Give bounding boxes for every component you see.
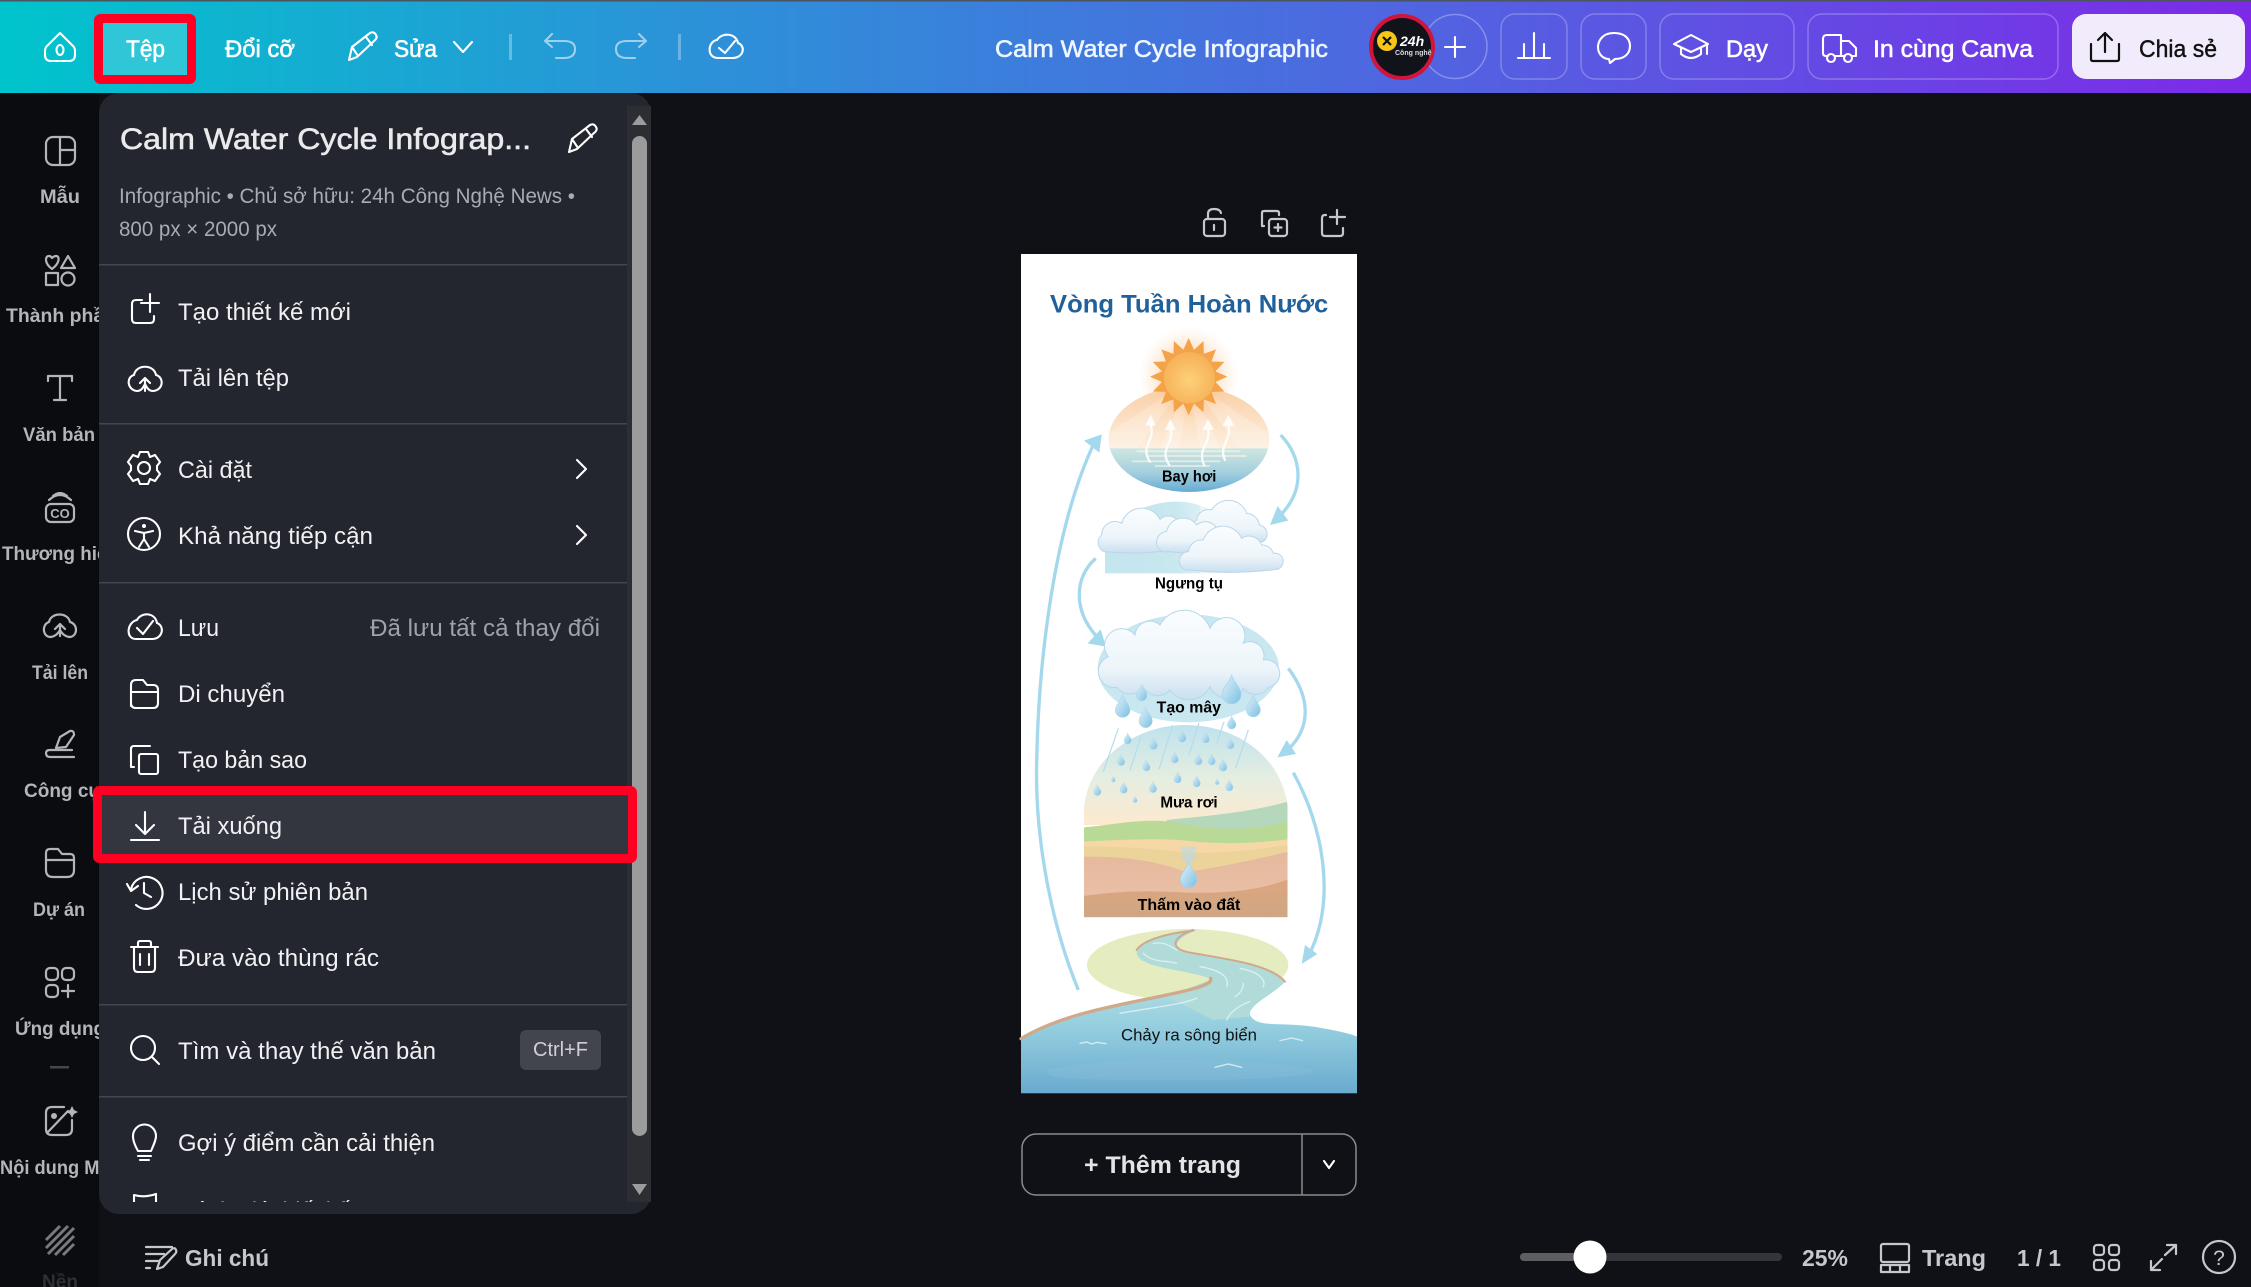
item: version history <box>127 877 368 909</box>
item: accessibility: Khả năng tiếp cận <box>178 523 373 550</box>
highlighted download item: Tải xuống <box>178 813 282 840</box>
label: cloud formation: Tạo mây <box>1157 700 1221 717</box>
sidebar item: uploads: Tải lên <box>32 663 88 684</box>
item: save <box>129 614 600 642</box>
rain streaks <box>1103 722 1248 772</box>
page view toggle: Trang <box>1922 1245 1986 1271</box>
highlighted download item <box>98 790 632 858</box>
add page button: + Thêm trang <box>1084 1152 1241 1179</box>
sidebar item: background <box>42 1226 78 1287</box>
item: settings <box>128 452 586 484</box>
rain drops <box>1094 730 1234 803</box>
button: print with Canva <box>1808 14 2058 79</box>
page view toggle <box>1881 1244 1986 1272</box>
item: move to trash: Đưa vào thùng rác <box>178 945 379 972</box>
item: clipped design review: Đánh giá thiết kế <box>178 1198 351 1225</box>
file menu panel <box>98 93 651 1225</box>
design metadata <box>119 185 575 241</box>
sidebar item: brand: Thương hiệu <box>2 544 119 565</box>
menu: edit: Sửa <box>394 36 438 63</box>
item: duplicate: Tạo bản sao <box>178 747 307 774</box>
button: share: Chia sẻ <box>2139 36 2217 63</box>
notes button <box>146 1245 269 1271</box>
evaporation scene <box>1107 327 1273 493</box>
cloud formation scene <box>1098 610 1280 729</box>
sidebar item: text: Văn bản <box>23 425 95 446</box>
icon: home <box>45 33 75 61</box>
sidebar item: text <box>23 376 95 446</box>
avatar: Công nghệ <box>1395 50 1432 57</box>
rain cloud <box>1098 610 1280 700</box>
icon: help <box>2203 1241 2235 1273</box>
icon: fullscreen <box>2151 1245 2176 1270</box>
collaborator add button <box>1423 14 1487 78</box>
label: evaporation: Bay hơi <box>1162 469 1216 486</box>
river and sea scene <box>1021 929 1357 1093</box>
sidebar item: projects: Dự án <box>33 900 85 921</box>
menu: resize: Đổi cỡ <box>225 36 295 63</box>
item: save: Đã lưu tất cả thay đổi <box>370 615 600 642</box>
item: save: Lưu <box>178 615 219 642</box>
sky and sea ellipse <box>1108 392 1270 492</box>
button: share <box>2072 14 2245 79</box>
label: condensation: Ngưng tụ <box>1155 575 1223 592</box>
design metadata: Infographic • Chủ sở hữu: 24h Công Nghệ News • <box>119 185 575 208</box>
icon: lock <box>1204 209 1225 236</box>
sidebar item: brand: CO <box>50 506 70 521</box>
item: accessibility <box>128 518 586 550</box>
sidebar item: apps: Ứng dụng <box>15 1018 105 1040</box>
menu heading: Calm Water Cycle Infograp... <box>120 123 531 156</box>
item: move to trash <box>131 941 379 972</box>
water highlights <box>1080 943 1303 1067</box>
item: find and replace: Tìm và thay thế văn bản <box>178 1038 436 1065</box>
condensation scene <box>1098 500 1283 592</box>
label: rainfall: Mưa rơi <box>1160 794 1218 811</box>
rising vapor arrows <box>1145 415 1234 465</box>
highlighted file button: Tệp <box>126 36 165 63</box>
river banks <box>1021 930 1285 1039</box>
item: upload file <box>129 365 289 392</box>
scrollbar <box>627 106 651 1202</box>
item: upload file: Tải lên tệp <box>178 365 289 392</box>
item: move <box>131 680 285 708</box>
label: infiltration: Thấm vào đất <box>1138 897 1241 914</box>
top toolbar <box>0 0 2251 93</box>
item: new design: Tạo thiết kế mới <box>178 299 351 326</box>
menu: edit <box>349 32 472 63</box>
sidebar item: uploads <box>32 614 88 684</box>
item: find and replace <box>131 1030 601 1070</box>
item: clipped design review <box>132 1192 350 1202</box>
sidebar item: projects <box>33 849 85 921</box>
button: comments <box>1581 14 1646 79</box>
sidebar item: magic media <box>0 1106 136 1179</box>
page action icons <box>1204 209 1345 236</box>
avatar: 24h <box>1399 33 1424 49</box>
arrow: soil to river <box>1293 773 1324 964</box>
item: move: Di chuyển <box>178 681 285 708</box>
zoom value: 25% <box>1802 1245 1848 1271</box>
button: insights <box>1501 14 1567 79</box>
sidebar item: templates: Mẫu <box>40 186 80 208</box>
sea <box>1021 980 1357 1093</box>
sidebar item: tools <box>24 731 100 802</box>
add page button <box>1022 1134 1356 1195</box>
icon: duplicate page <box>1262 211 1287 236</box>
river <box>1137 930 1285 1020</box>
icon: saved cloud <box>710 35 743 58</box>
button: teach <box>1660 14 1794 79</box>
highlighted file button <box>98 18 192 80</box>
infiltration drop <box>1179 847 1198 888</box>
sidebar item: tools: Công cụ <box>24 781 100 802</box>
icon: grid view <box>2094 1245 2119 1270</box>
label: to rivers and sea: Chảy ra sông biển <box>1121 1026 1257 1045</box>
arrow: sun to clouds <box>1270 435 1298 525</box>
rain and soil scene <box>1084 722 1288 917</box>
sidebar item: apps <box>15 968 105 1040</box>
notes button: Ghi chú <box>185 1245 269 1271</box>
arrow: sea back to evaporation <box>1037 434 1102 990</box>
clouds <box>1098 500 1283 572</box>
icon: add page <box>1322 210 1345 236</box>
lower part of infographic <box>1021 610 1357 1093</box>
icon: undo <box>545 34 575 58</box>
design metadata: 800 px × 2000 px <box>119 218 277 241</box>
upper part of infographic <box>1037 292 1328 990</box>
zoom slider <box>1520 1240 1782 1274</box>
page count: 1 / 1 <box>2017 1245 2061 1271</box>
arrow: condensation to cloud formation <box>1079 558 1106 647</box>
button: teach: Dạy <box>1726 36 1768 63</box>
icon: help: ? <box>2213 1247 2225 1270</box>
bottom zoom controls <box>1520 1240 2235 1274</box>
avatar <box>1371 16 1433 78</box>
sidebar item: templates <box>40 137 80 208</box>
infographic canvas <box>1021 254 1357 1093</box>
item: version history: Lịch sử phiên bản <box>178 879 368 906</box>
item: settings: Cài đặt <box>178 457 252 484</box>
item: design suggestions: Gợi ý điểm cần cải thiện <box>178 1130 435 1157</box>
sun <box>1139 327 1239 427</box>
document title: Calm Water Cycle Infographic <box>995 36 1328 63</box>
title: Vòng Tuần Hoàn Nước <box>1050 292 1328 319</box>
item: design suggestions <box>133 1124 435 1160</box>
arrow: cloud to rain <box>1277 668 1305 757</box>
button: print with Canva: In cùng Canva <box>1873 36 2034 63</box>
item: duplicate <box>131 746 307 774</box>
sidebar item: magic media: Nội dung Magic <box>0 1158 136 1179</box>
sidebar item: elements: Thành phần <box>6 306 116 327</box>
item: new design <box>132 294 351 326</box>
sidebar item: elements <box>6 256 116 327</box>
sidebar item: brand <box>2 493 119 565</box>
raindrops under cloud <box>1115 675 1260 729</box>
left sidebar <box>0 93 136 1287</box>
icon: redo <box>616 34 646 58</box>
item: find and replace: Ctrl+F <box>533 1039 588 1061</box>
